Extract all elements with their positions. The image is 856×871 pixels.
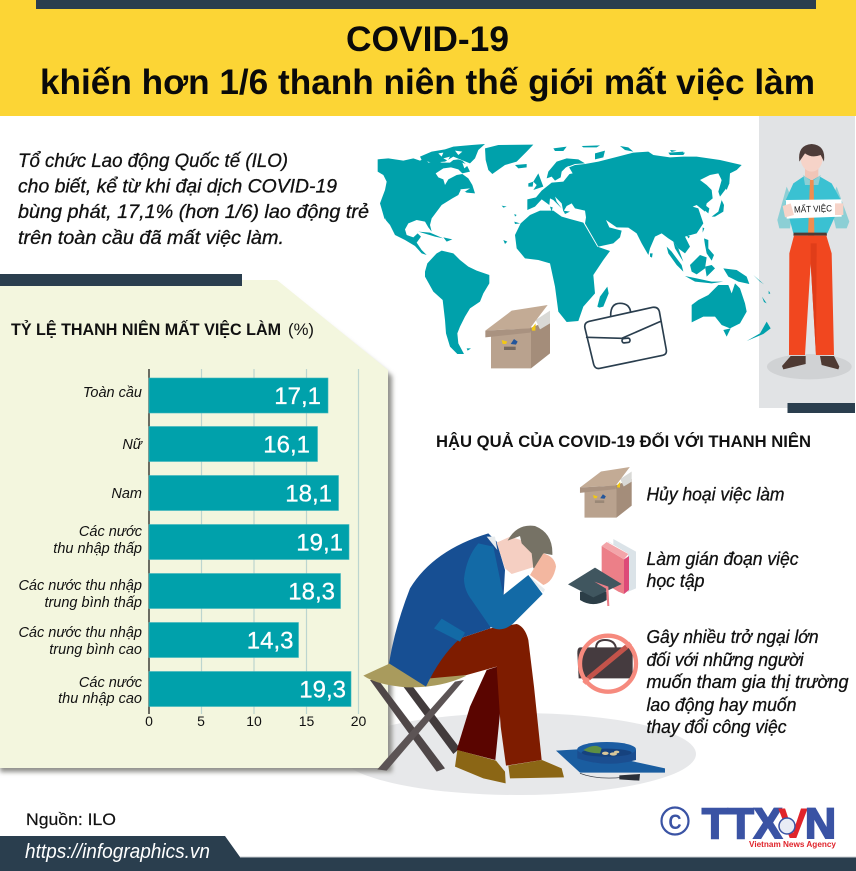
axis labels: 20 <box>351 713 366 729</box>
sign text: MẤT VIỆC <box>794 203 833 215</box>
logo: TTXVN: C <box>668 811 682 834</box>
pocket <box>434 619 465 642</box>
category labels: thu nhập cao <box>58 691 142 707</box>
title: COVID-19 <box>346 20 509 59</box>
grid and axis <box>149 369 358 714</box>
logo: TTXVN: TTX <box>702 800 782 848</box>
intro text: cho biết, kể từ khi đại dịch COVID-19 <box>18 176 337 198</box>
intro text: trên toàn cầu đã mất việc làm. <box>18 228 284 249</box>
bar values: 19,1 <box>296 530 343 556</box>
bar values: 19,3 <box>299 676 346 704</box>
panel: bar chart <box>0 274 392 772</box>
illustration: seated distressed man <box>363 526 665 783</box>
chart title: TỶ LỆ THANH NIÊN MẤT VIỆC LÀM <box>11 320 281 339</box>
consequence: jobs: Hủy hoại việc làm <box>646 485 785 505</box>
bar values <box>247 383 346 704</box>
intro text: Tổ chức Lao động Quốc tế (ILO) <box>18 151 288 172</box>
category labels: Các nước thu nhập <box>18 578 142 594</box>
footer bar <box>0 836 856 871</box>
category labels: Các nước <box>79 675 143 691</box>
front leg <box>430 624 542 766</box>
chart unit: (%) <box>288 320 314 339</box>
category labels: Nữ <box>122 437 144 453</box>
footer url: https://infographics.vn <box>25 841 210 863</box>
bar values: 14,3 <box>247 628 294 654</box>
category labels: trung bình cao <box>49 642 142 658</box>
hand <box>530 553 556 585</box>
axis labels: 0 <box>145 713 153 729</box>
category labels: Nam <box>111 486 142 502</box>
logo: TTXVN: N <box>805 800 836 848</box>
intro text: bùng phát, 17,1% (hơn 1/6) lao động trẻ <box>18 202 369 223</box>
logo: TTXVN: Vietnam News Agency <box>749 839 836 849</box>
category labels: thu nhập thấp <box>53 541 142 557</box>
axis labels: 5 <box>197 713 205 729</box>
consequence: education: Làm gián đoạn việc <box>646 549 798 569</box>
cuff <box>527 575 545 593</box>
bar values: 17,1 <box>274 383 321 410</box>
category labels: trung bình thấp <box>44 595 142 611</box>
shoes <box>455 750 564 783</box>
icon: books and graduation cap <box>568 539 636 606</box>
consequence: labour market: lao động hay muốn <box>646 695 796 715</box>
category labels: Các nước <box>79 524 143 540</box>
panel: unemployed person <box>759 116 855 413</box>
bars <box>149 378 351 706</box>
icon: job box <box>580 467 632 518</box>
axis labels <box>145 713 366 729</box>
category labels: Các nước thu nhập <box>18 625 142 641</box>
consequence: labour market: Gây nhiều trở ngại lớn <box>646 627 818 647</box>
cap on floor <box>556 742 665 781</box>
bar values: 16,1 <box>263 432 310 458</box>
header banner <box>0 0 856 116</box>
world map <box>378 144 771 354</box>
consequence: education <box>646 549 798 591</box>
title: khiến hơn 1/6 thanh niên thế giới mất việc làm <box>40 63 815 102</box>
consequence: labour market <box>646 627 848 737</box>
icon: cardboard box <box>485 305 550 368</box>
figure holding sign <box>767 144 852 379</box>
consequence: labour market: muốn tham gia thị trường <box>646 672 848 692</box>
source: Nguồn: ILO <box>26 810 116 829</box>
back leg <box>457 667 501 760</box>
consequence: labour market: thay đổi công việc <box>646 717 786 737</box>
sleeve <box>464 543 543 629</box>
logo: TTXVN: V <box>778 800 808 848</box>
hair <box>508 526 552 568</box>
face and neck <box>497 537 535 574</box>
category labels: Toàn cầu <box>83 385 142 401</box>
icon: prohibited briefcase <box>577 636 636 692</box>
logo: TTXVN <box>662 800 836 849</box>
coat <box>389 533 505 687</box>
intro text <box>18 151 369 249</box>
consequences heading: HẬU QUẢ CỦA COVID-19 ĐỐI VỚI THANH NIÊN <box>436 431 811 451</box>
consequence: labour market: đối với những người <box>646 650 804 670</box>
consequence: education: học tập <box>646 571 704 591</box>
ground shadow <box>340 713 696 795</box>
bar values: 18,3 <box>288 578 335 606</box>
stool <box>363 663 467 772</box>
bar values: 18,1 <box>285 480 332 508</box>
axis labels: 15 <box>299 713 314 729</box>
title <box>40 20 815 102</box>
category labels <box>18 385 144 707</box>
icon: briefcase <box>585 303 666 368</box>
axis labels: 10 <box>246 713 262 729</box>
